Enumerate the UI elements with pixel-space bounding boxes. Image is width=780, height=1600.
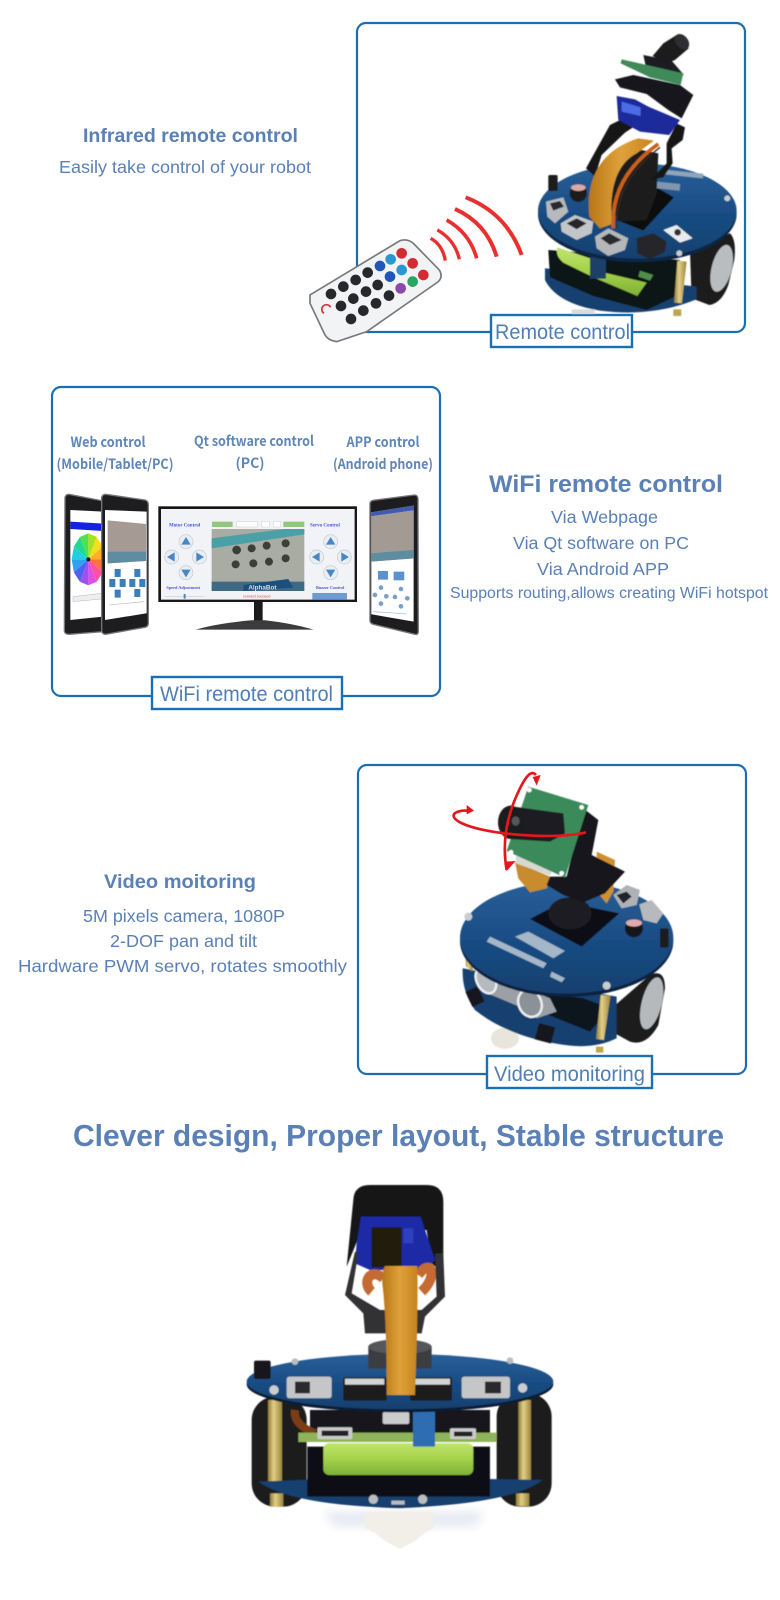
small blue module [413, 1412, 435, 1447]
monitor [158, 506, 357, 630]
USB and control ports [546, 175, 693, 259]
caption: qt software control [194, 431, 315, 473]
ribbon cable [515, 850, 615, 903]
USB ports [287, 1377, 510, 1401]
floor shadow [323, 1512, 483, 1527]
camera board [498, 787, 588, 878]
lower plate [463, 968, 617, 1053]
arrow pads [165, 535, 351, 580]
pan tilt base [530, 897, 619, 947]
caption: app control: APP control [346, 432, 420, 452]
servo [355, 1217, 435, 1270]
caption: qt software control: Qt software control [194, 431, 315, 451]
icon: infrared waves [431, 197, 522, 261]
icon: rotation arrows [454, 773, 586, 871]
qt control labels: Speed Adjustment [166, 585, 201, 590]
ribbon cable [382, 1266, 418, 1395]
battery [557, 247, 653, 296]
black bracket right [650, 123, 685, 180]
panel: wifi remote control [52, 387, 440, 709]
ultrasonic sensors [472, 963, 557, 1021]
wheel [690, 233, 737, 305]
robot illustration: remote control view [538, 31, 737, 316]
qt control labels [166, 524, 345, 590]
qt control labels: Servo Control [310, 524, 341, 529]
heading: video monitoring: Video moitoring [104, 871, 256, 893]
tilt bracket [345, 1252, 445, 1333]
text: infrared description: Easily take control of your robot [59, 157, 311, 177]
caster [491, 1028, 519, 1049]
text: routing support: Supports routing,allows creating WiFi hotspot [450, 585, 769, 602]
text: via android app: Via Android APP [537, 559, 669, 579]
video feed [212, 529, 304, 592]
heading: clever design: Clever design, Proper layout, Stable structure [73, 1118, 724, 1153]
lower plate [545, 268, 697, 316]
camera block [615, 31, 693, 118]
phone: android app [370, 495, 418, 634]
text: via webpage: Via Webpage [551, 507, 658, 527]
battery [323, 1443, 473, 1475]
panel: video monitoring [358, 765, 746, 1088]
label: wifi remote control [152, 677, 342, 709]
cylinder [368, 1339, 432, 1369]
text: camera spec: 5M pixels camera, 1080P [83, 906, 285, 926]
top plate [460, 882, 673, 997]
IR receiver [254, 1361, 271, 1379]
camera back plate [347, 1185, 443, 1273]
caption: web control: (Mobile/Tablet/PC) [56, 454, 174, 474]
dark cylinder [608, 148, 658, 222]
phone: web control buttons [102, 494, 148, 634]
bracket [547, 808, 625, 902]
caster wheel [365, 1512, 433, 1549]
label: video monitoring: Video monitoring [494, 1063, 645, 1086]
caption: qt software control: (PC) [235, 453, 265, 473]
heading: wifi remote control: WiFi remote control [489, 471, 723, 498]
battery holder [307, 1447, 490, 1497]
wheel [612, 973, 668, 1043]
chassis and battery holder [548, 250, 680, 310]
color wheel [72, 533, 105, 585]
video feed: AlphaBot [248, 585, 277, 592]
qt control labels: Buzzer Control [316, 585, 345, 590]
wheels [252, 1393, 552, 1507]
caption: app control: (Android phone) [333, 454, 433, 474]
label: wifi remote control: WiFi remote control [160, 683, 333, 706]
brass standoffs [465, 952, 611, 1040]
robot illustration: front view [247, 1185, 553, 1549]
ports [613, 885, 669, 948]
heading: infrared remote control: Infrared remote control [83, 125, 298, 147]
phone: color wheel web page [64, 494, 105, 634]
label: remote control [491, 315, 632, 347]
caption: web control [56, 432, 174, 474]
black bracket left [586, 116, 635, 177]
icon: infrared remote handset [310, 240, 441, 342]
caption: web control: Web control [70, 432, 146, 452]
servo wires [613, 144, 660, 228]
top plate [247, 1354, 553, 1412]
brass standoffs [268, 1400, 531, 1507]
servo wires [367, 1268, 432, 1292]
monitor: connect succeed [243, 594, 270, 598]
panel: remote control [357, 23, 745, 347]
servo [617, 96, 680, 135]
qt control labels: Motor Control [169, 524, 201, 529]
raspberry pi board [295, 1410, 497, 1442]
robot illustration: camera view [460, 787, 673, 1053]
caption: app control [333, 432, 433, 474]
text: servo: Hardware PWM servo, rotates smoothly [18, 956, 347, 976]
devices illustration [64, 494, 418, 634]
text: pan tilt: 2-DOF pan and tilt [110, 931, 257, 951]
pan tilt base [615, 188, 674, 231]
top plate [538, 163, 737, 262]
brass standoff [674, 261, 687, 303]
lower plate [258, 1478, 543, 1508]
label: video monitoring [487, 1056, 652, 1088]
ribbon cable [589, 138, 654, 228]
text: via qt software: Via Qt software on PC [513, 533, 689, 553]
label: remote control: Remote control [495, 321, 630, 344]
